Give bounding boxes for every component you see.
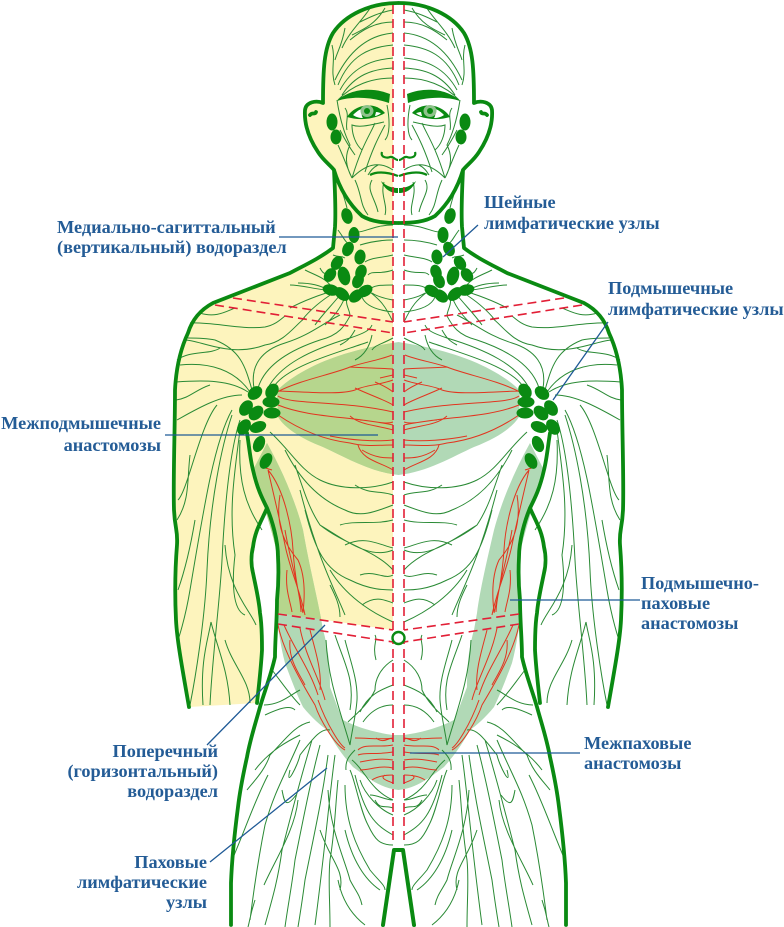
lymph vessels, nodes and watersheds: right half: [398, 3, 623, 927]
label: inter-axillary anastomoses: анастомозы: [64, 435, 161, 455]
vertical medial-sagittal watershed: [393, 5, 404, 843]
label: inguinal nodes: узлы: [166, 892, 207, 912]
green anastomosis zones: [253, 342, 544, 790]
label: inter-inguinal anastomoses: анастомозы: [584, 753, 681, 773]
label: axillary nodes: лимфатические узлы: [608, 299, 784, 319]
label: inguinal nodes: Паховые: [134, 852, 207, 872]
label: medial-sagittal watershed: (вертикальный) водораздел: [57, 237, 287, 258]
lymph vessels, nodes and watersheds: left half: [174, 3, 398, 927]
label: cervical nodes: Шейные: [484, 192, 556, 212]
label: inter-axillary anastomoses: Межподмышечные: [1, 413, 161, 433]
label: transverse watershed: Поперечный: [113, 741, 218, 761]
label: cervical nodes: лимфатические узлы: [484, 213, 660, 233]
label: medial-sagittal watershed: Медиально-сагиттальный: [57, 217, 276, 237]
label: inter-inguinal anastomoses: Межпаховые: [584, 733, 691, 753]
navel: [392, 632, 404, 644]
yellow left half of the body: [175, 3, 393, 707]
label: axillo-inguinal anastomoses: паховые: [641, 593, 710, 613]
white gap between arm and torso: [252, 510, 278, 705]
label: axillo-inguinal anastomoses: Подмышечно-: [641, 573, 759, 593]
leader lines: [165, 225, 640, 862]
label: inguinal nodes: лимфатические: [77, 872, 207, 892]
label: transverse watershed: (горизонтальный): [67, 761, 218, 782]
label: axillary nodes: Подмышечные: [608, 278, 733, 298]
label: axillo-inguinal anastomoses: анастомозы: [641, 613, 738, 633]
label: transverse watershed: водораздел: [127, 781, 218, 801]
